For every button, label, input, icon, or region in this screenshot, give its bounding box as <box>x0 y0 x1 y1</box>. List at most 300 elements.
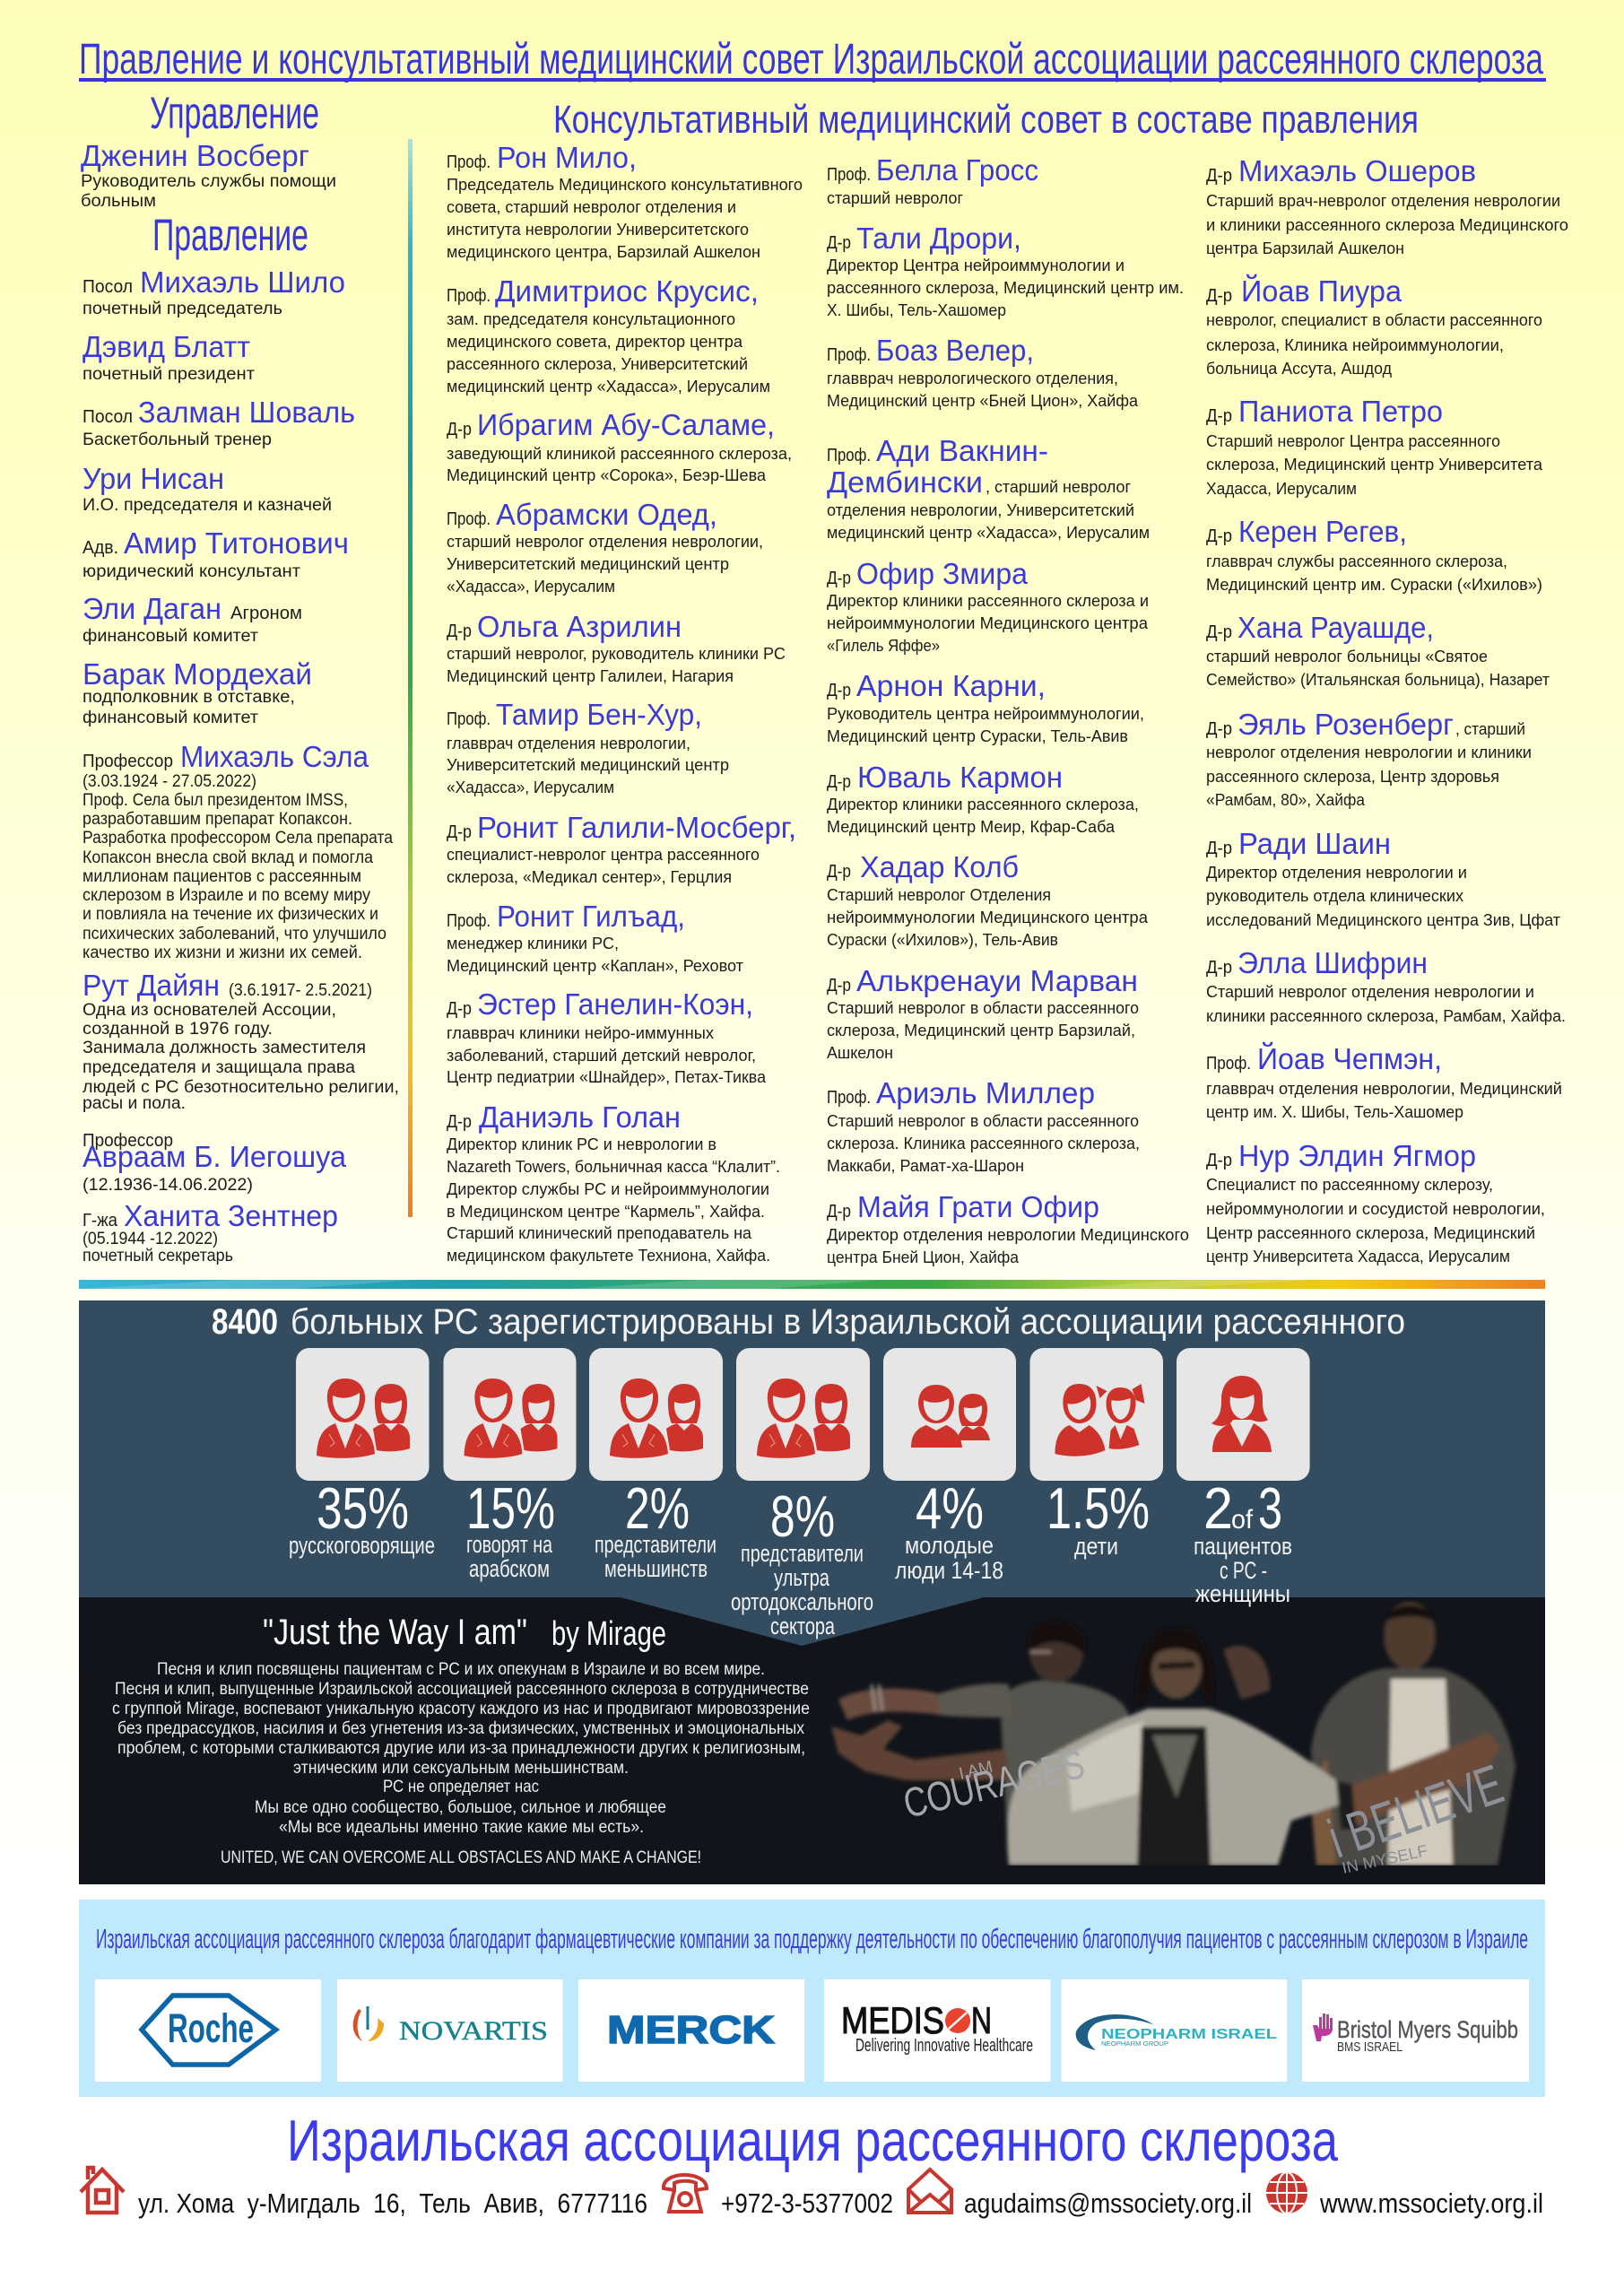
person: Ben-Hur <box>447 698 729 796</box>
text block: song description: Мы все одно сообщество, большое, сильное и любящее <box>255 1797 666 1817</box>
person: Piura: склероза, Клиника нейроиммунологии, <box>1206 335 1504 354</box>
person: Alkrenawi: Д-р <box>827 976 851 996</box>
person: Blatt: почетный президент <box>83 365 255 384</box>
person: Alkrenawi: Ашкелон <box>827 1043 893 1062</box>
logo: Neopharm Israel: NEOPHARM ISRAEL <box>1101 2027 1277 2042</box>
person: Dagan: Агроном <box>230 604 302 623</box>
person: Nisan: И.О. председателя и казначей <box>83 496 332 515</box>
person: Osherov: Михаэль Ошеров <box>1238 154 1476 187</box>
person: Rawashdeh <box>1206 611 1550 689</box>
logo: Bristol Myers Squibb: BMS ISRAEL <box>1337 2039 1403 2055</box>
person: Abramsky <box>447 498 763 596</box>
person: Karni: Руководитель центра нейроиммунологии, <box>827 704 1144 723</box>
logo: Bristol Myers Squibb <box>1302 1979 1529 2082</box>
person: Chapman: центр им. Х. Шибы, Тель-Хашомер <box>1206 1102 1463 1121</box>
person: Ben-Hur: «Хадасса», Иерусалим <box>447 778 614 796</box>
person: Gilad <box>447 900 744 975</box>
person: Grati Ofir: Директор отделения неврологии Медицинского <box>827 1225 1189 1244</box>
person: Zentner: Ханита Зентнер <box>124 1199 338 1232</box>
person: Regev: Керен Регев, <box>1238 515 1407 548</box>
person: Galili-Mosberg <box>447 811 796 886</box>
person: Dayan: председателя и защищала права <box>83 1058 355 1077</box>
person: Kolb: Сураски («Ихилов»), Тель-Авив <box>827 930 1058 949</box>
card: arabic speakers icon <box>443 1348 576 1481</box>
person: Abu-Salame: Д-р <box>447 420 472 439</box>
person: Rosenberg <box>1206 708 1532 809</box>
stat: 8% ultra-orthodox: сектора <box>770 1613 836 1639</box>
person: Dayan: (3.6.1917- 2.5.2021) <box>229 981 372 1000</box>
person: Dayan: расы и пола. <box>83 1094 186 1113</box>
person: Ganelin-Cohen: главврач клиники нейро-иммунных <box>447 1023 715 1042</box>
person: Gilad: Медицинский центр «Каплан», Реховот <box>447 956 744 975</box>
heading: advisory council: Консультативный медицинский совет в составе правления <box>553 98 1419 142</box>
person: Shoval <box>83 396 355 449</box>
person: Zentner: (05.1944 -12.2022) <box>83 1230 218 1248</box>
person: Titonovich <box>83 526 349 581</box>
person: Shaeen: руководитель отдела клинических <box>1206 886 1464 905</box>
person: Titonovich: юридический консультант <box>83 562 300 581</box>
stat: 35% russian speakers <box>289 1475 435 1559</box>
stat: 2% minorities: представители <box>595 1531 716 1558</box>
person: Titonovich: Амир Титонович <box>124 526 349 560</box>
rainbow band <box>79 1280 1545 1289</box>
logo: Neopharm Israel: NEOPHARM GROUP <box>1101 2041 1168 2048</box>
person: Shaeen <box>1206 827 1560 929</box>
person: Dayan: Рут Дайян <box>83 969 220 1002</box>
card: russian speakers icon <box>296 1348 429 1481</box>
person: Sela: миллионам пациентов с рассеянным <box>83 867 361 886</box>
email: agudaims@mssociety.org.il <box>964 2187 1252 2219</box>
overlay word: IN MYSELF: IN MYSELF <box>1341 1841 1429 1877</box>
person: Rawashdeh: старший невролог больницы «Святое <box>1206 647 1488 665</box>
person: Zmira: Офир Змира <box>856 557 1029 590</box>
stat: 4% young people: молодые <box>905 1532 994 1559</box>
person: Milo: Рон Мило, <box>497 141 637 174</box>
stat: 2 of 3 women: с РС - <box>1220 1557 1267 1584</box>
person: Golan: Д-р <box>447 1112 472 1132</box>
logo: Roche <box>95 1979 321 2082</box>
person: Alkrenawi: Алькренауи Марван <box>856 964 1138 997</box>
person: Chapman: Проф. <box>1206 1054 1251 1074</box>
person: Petrou: Паниота Петро <box>1238 395 1443 428</box>
person: Vosberg: больным <box>81 192 156 211</box>
person: Zentner <box>83 1199 338 1265</box>
text block: song description: проблем, с которыми сталкиваются другие или из-за принадлежности других к религиозным, <box>117 1738 805 1758</box>
person: Osherov: и клиники рассеянного склероза Медицинского <box>1206 215 1568 234</box>
decorative photo shapes <box>1311 1668 1515 1866</box>
person: Miller: склероза. Клиника рассеянного склероза, <box>827 1134 1140 1152</box>
person: Abu-Salame <box>447 408 792 484</box>
logo: Merck: MERCK <box>607 2008 775 2052</box>
stat: 2% minorities <box>595 1475 716 1582</box>
person: Shaeen: Д-р <box>1206 839 1232 858</box>
person: Rosenberg: невролог отделения неврологии и клиники <box>1206 743 1532 761</box>
person: Karni: Медицинский центр Сураски, Тель-Авив <box>827 726 1128 745</box>
person: Sela: психических заболеваний, что улучшило <box>83 925 386 944</box>
person: Sela: Копаксон внесла свой вклад и помогла <box>83 848 373 867</box>
person: Galili-Mosberg: специалист-невролог центра рассеянного <box>447 845 760 864</box>
person: Sela: и повлияла на течение их физических и <box>83 905 378 924</box>
person: Piura: больница Ассута, Ашдод <box>1206 359 1392 378</box>
stat: 2 of 3 women: женщины <box>1195 1580 1290 1607</box>
stat: 4% young people: 4% <box>916 1475 984 1541</box>
website: www.mssociety.org.il <box>1319 2187 1543 2219</box>
person: Yaghmour: Нур Элдин Ягмор <box>1238 1139 1476 1172</box>
overlay word: COURAGES: COURAGES <box>899 1740 1089 1827</box>
logo: Merck <box>578 1979 804 2082</box>
person: Krousis <box>447 274 770 396</box>
person: Abu-Salame: Ибрагим Абу-Саламе, <box>477 408 775 441</box>
person: Rosenberg: Д-р <box>1206 719 1232 739</box>
person: Zentner: почетный секретарь <box>83 1247 233 1265</box>
person: Gilad: Проф. <box>447 911 491 931</box>
person: Mordechai: подполковник в отставке, <box>83 688 295 707</box>
stat: 8% ultra-orthodox: 8% <box>770 1483 835 1549</box>
person: Alkrenawi: склероза, Медицинский центр Барзилай, <box>827 1021 1135 1039</box>
overlay word: BELIEVE: i BELIEVE <box>1321 1753 1511 1870</box>
panel: management column <box>81 88 399 1265</box>
heading: registered patients: больных РС зарегистрированы в Израильской ассоциации рассеянного <box>291 1302 1405 1342</box>
panel: statistics <box>79 1300 1545 1655</box>
person: Petrou: Хадасса, Иерусалим <box>1206 479 1357 498</box>
person: Gross <box>827 153 1038 207</box>
panel: sponsors <box>79 1900 1545 2097</box>
person: Krousis: Димитриос Крусис, <box>495 274 759 308</box>
person: Petrou <box>1206 395 1543 498</box>
person: Miller: Проф. <box>827 1088 871 1108</box>
person: Abramsky: Абрамски Одед, <box>496 498 717 531</box>
phone number: +972-3-5377002 <box>721 2187 893 2219</box>
person: Yehoshua: Профессор <box>83 1131 173 1151</box>
person: Rawashdeh: Хана Рауашде, <box>1238 611 1434 644</box>
person: Rawashdeh: Семейство» (Итальянская больница), Назарет <box>1206 670 1550 689</box>
person: Golan: Старший клинический преподаватель на <box>447 1223 752 1242</box>
person: Drori: Д-р <box>827 233 851 253</box>
person: Vaknin-Dembinsky: отделения неврологии, Университетский <box>827 500 1134 519</box>
person: Abramsky: Проф. <box>447 509 491 529</box>
person: Miller <box>827 1076 1140 1175</box>
person: Karni <box>827 669 1144 745</box>
person: Blatt: Дэвид Блатт <box>83 330 250 363</box>
stat: 8% ultra-orthodox <box>731 1483 873 1639</box>
person: Piura: невролог, специалист в области рассеянного <box>1206 310 1542 329</box>
stat: 35% russian speakers: 35% <box>317 1475 409 1541</box>
person: Sela: Михаэль Сэла <box>180 740 369 773</box>
person: Gilad: Ронит Гилъад, <box>497 900 685 933</box>
stat: 8% ultra-orthodox: представители <box>741 1540 864 1567</box>
person: Sela: Разработка профессором Села препарата <box>83 829 393 848</box>
person: Rosenberg: Эяль Розенберг <box>1238 708 1454 741</box>
stat: 2% minorities: 2% <box>625 1475 690 1541</box>
text block: song description: «Мы все идеальны именно такие какие мы есть». <box>279 1817 644 1837</box>
person: Chapman <box>1206 1042 1562 1121</box>
person: Yaghmour: Центр рассеянного склероза, Медицинский <box>1206 1223 1535 1242</box>
stat: 2 of 3 women: 2 <box>1203 1475 1233 1541</box>
person: Osherov: Старший врач-невролог отделения неврологии <box>1206 191 1560 210</box>
person: Azrilin: Медицинский центр Галилеи, Нагария <box>447 666 734 685</box>
person: Shoval: Залман Шоваль <box>138 396 355 429</box>
text block: song description: Песня и клип посвящены пациентам с РС и их опекунам в Израиле и во всем мире. <box>157 1659 765 1679</box>
person: Krousis: зам. председателя консультационного <box>447 309 735 328</box>
address: ул. Хома у-Мигдаль 16, Тель Авив, 6777116 <box>138 2187 647 2219</box>
stat: 4% young people <box>895 1475 1003 1584</box>
person: Vosberg: Руководитель службы помощи <box>81 172 336 191</box>
stat: 15% arabic: арабском <box>469 1555 550 1582</box>
person: Abramsky: старший невролог отделения неврологии, <box>447 532 763 551</box>
person: Karmon: Юваль Кармон <box>857 761 1063 794</box>
icon: globe <box>1266 2172 1307 2213</box>
person: Dagan: финансовый комитет <box>83 627 258 646</box>
person: Rawashdeh: Д-р <box>1206 622 1232 642</box>
person: Shaeen: Директор отделения неврологии и <box>1206 863 1467 882</box>
person: Vaknin-Dembinsky: Ади Вакнин- <box>876 434 1048 467</box>
person: Ben-Hur: Университетский медицинский центр <box>447 755 729 774</box>
person: Alkrenawi: Старший невролог в области рассеянного <box>827 998 1139 1017</box>
footer heading: Израильская ассоциация рассеянного склероза <box>287 2108 1339 2173</box>
person: Rosenberg: «Рамбам, 80», Хайфа <box>1206 790 1366 809</box>
person: Nisan <box>83 462 332 515</box>
heading: management: Управление <box>150 88 319 138</box>
gradient divider <box>408 139 413 1217</box>
person: Shilo: Михаэль Шило <box>140 265 345 299</box>
logo: Medison: N <box>971 1999 992 2041</box>
heading: song title: "Just the Way I am" <box>263 1613 527 1652</box>
person: Sela: качество их жизни и жизни их семей. <box>83 944 362 962</box>
person: Mordechai <box>83 657 312 727</box>
card: ultra-orthodox icon <box>736 1348 870 1481</box>
person: Zmira: Директор клиники рассеянного склероза и <box>827 591 1149 610</box>
person: Dagan <box>83 592 302 646</box>
logo: Medison: Delivering Innovative Healthcare <box>855 2036 1033 2056</box>
person: Golan: Директор службы РС и нейроиммунологии <box>447 1179 769 1198</box>
stat: 1.5% children: дети <box>1074 1533 1118 1560</box>
person: Zmira <box>827 557 1149 655</box>
person: Piura: Д-р <box>1206 286 1232 306</box>
person: Petrou: Д-р <box>1206 406 1232 426</box>
person: Miller: Старший невролог в области рассеянного <box>827 1111 1139 1130</box>
person: Abramsky: Университетский медицинский центр <box>447 554 729 573</box>
person: Zentner: Г-жа <box>83 1211 118 1231</box>
person: Karmon: Медицинский центр Меир, Кфар-Саба <box>827 817 1116 836</box>
person: Sela: разработавшим препарат Копаксон. <box>83 810 352 829</box>
text block: song description: этническим или сексуальным меньшинствам. <box>293 1758 629 1778</box>
card: children icon <box>1029 1348 1163 1481</box>
person: Galili-Mosberg: Ронит Галили-Мосберг, <box>477 811 796 844</box>
person: Golan: медицинском факультете Техниона, Хайфа. <box>447 1246 770 1265</box>
stat: 2 of 3 women: 3 <box>1258 1475 1282 1541</box>
person: Regev: главврач службы рассеянного склероза, <box>1206 552 1507 570</box>
person: Milo <box>447 141 803 261</box>
person: Shifrin: Старший невролог отделения неврологии и <box>1206 982 1534 1001</box>
person: Drori: Х. Шибы, Тель-Хашомер <box>827 300 1006 319</box>
person: Krousis: медицинского совета, директор центра <box>447 332 743 351</box>
person: Miller: Маккаби, Рамат-ха-Шарон <box>827 1156 1024 1175</box>
person: Osherov <box>1206 154 1568 257</box>
stat: 8% ultra-orthodox: ортодоксального <box>731 1588 873 1615</box>
person: Dayan: созданной в 1976 году. <box>83 1020 273 1039</box>
person: Yaghmour: Специалист по рассеянному склерозу, <box>1206 1175 1493 1194</box>
person: Vaknin-Dembinsky <box>827 434 1150 542</box>
person: Mordechai: финансовый комитет <box>83 709 258 727</box>
person: Weller: Боаз Велер, <box>876 334 1034 367</box>
person: Zmira: Д-р <box>827 569 851 588</box>
person: Alkrenawi <box>827 964 1139 1062</box>
overlay word: I AM: I AM <box>957 1758 994 1784</box>
person: Gross: Проф. <box>827 165 871 185</box>
stat: 15% arabic: 15% <box>466 1475 555 1541</box>
stat: 1.5% children <box>1046 1475 1150 1560</box>
person: Milo: совета, старший невролог отделения и <box>447 197 736 216</box>
person: Yaghmour: Д-р <box>1206 1151 1232 1170</box>
person: Milo: медицинского центра, Барзилай Ашкелон <box>447 242 760 261</box>
person: Vaknin-Dembinsky: , старший невролог <box>986 477 1131 496</box>
person: Golan: в Медицинском центре “Кармель”, Хайфа. <box>447 1202 765 1221</box>
icon: telephone <box>664 2175 707 2212</box>
person: Krousis: рассеянного склероза, Университетский <box>447 354 748 373</box>
person: Kolb: нейроиммунологии Медицинского центра <box>827 908 1149 926</box>
person: Chapman: главврач отделения неврологии, Медицинский <box>1206 1079 1562 1098</box>
heading: board: Правление <box>152 210 308 260</box>
text block: song description: UNITED, WE CAN OVERCOME ALL OBSTACLES AND MAKE A CHANGE! <box>221 1848 701 1867</box>
person: Miller: Ариэль Миллер <box>876 1076 1095 1109</box>
person: Grati Ofir: Майя Грати Офир <box>857 1190 1099 1223</box>
icon: house <box>81 2168 124 2213</box>
person: Grati Ofir: центра Бней Цион, Хайфа <box>827 1248 1020 1266</box>
person: Kolb <box>827 850 1149 949</box>
person: Petrou: склероза, Медицинский центр Университета <box>1206 455 1543 474</box>
person: Dayan: Занимала должность заместителя <box>83 1039 366 1057</box>
person: Karni: Д-р <box>827 681 851 700</box>
person: Shilo: почетный председатель <box>83 300 282 318</box>
person: Ben-Hur: Тамир Бен-Хур, <box>496 698 702 731</box>
heading: song title: by Mirage <box>551 1615 666 1653</box>
person: Ben-Hur: главврач отделения неврологии, <box>447 734 690 752</box>
person: Drori: рассеянного склероза, Медицинский центр им. <box>827 278 1184 297</box>
person: Osherov: Д-р <box>1206 166 1232 186</box>
person: Vaknin-Dembinsky: медицинский центр «Хадасса», Иерусалим <box>827 523 1150 542</box>
person: Shaeen: Ради Шаин <box>1238 827 1391 860</box>
person: Azrilin <box>447 610 786 685</box>
person: Milo: института неврологии Университетского <box>447 220 749 239</box>
person: Ganelin-Cohen: Центр педиатрии «Шнайдер», Петах-Тиква <box>447 1067 767 1086</box>
stat: 35% russian speakers: русскоговорящие <box>289 1532 435 1559</box>
stat: 2 of 3 women: пациентов <box>1194 1533 1292 1560</box>
person: Golan <box>447 1100 780 1265</box>
person: Sela: склерозом в Израиле и по всему миру <box>83 886 370 905</box>
person: Galili-Mosberg: Д-р <box>447 822 472 842</box>
person: Vosberg <box>81 139 336 211</box>
person: Regev: Медицинский центр им. Сураски («Ихилов») <box>1206 575 1542 594</box>
person: Shilo <box>83 265 345 318</box>
person: Kolb: Хадар Колб <box>860 850 1019 883</box>
person: Yaghmour: центр Университета Хадасса, Иерусалим <box>1206 1247 1510 1265</box>
person: Azrilin: Ольга Азрилин <box>477 610 682 643</box>
person: Shifrin <box>1206 946 1566 1025</box>
text block: song description: без предрассудков, насилия и без угнетения из-за физических, умственных и эмоциональных <box>117 1718 804 1738</box>
person: Grati Ofir: Д-р <box>827 1202 851 1222</box>
person: Chapman: Йоав Чепмэн, <box>1257 1042 1442 1075</box>
person: Weller <box>827 334 1139 410</box>
person: Dayan: Одна из основателей Ассоции, <box>83 1001 336 1020</box>
person: Shifrin: клиники рассеянного склероза, Рамбам, Хайфа. <box>1206 1006 1566 1025</box>
person: Gilad: менеджер клиники РС, <box>447 934 619 952</box>
person: Shaeen: исследований Медицинского центра Зив, Цфат <box>1206 910 1560 929</box>
person: Blatt <box>83 330 255 384</box>
stat: 2% minorities: меньшинств <box>604 1555 708 1582</box>
person: Shoval: Посол <box>83 407 133 427</box>
person: Regev: Д-р <box>1206 526 1232 546</box>
icon: envelope <box>908 2170 951 2213</box>
logo: Medison <box>824 1979 1051 2082</box>
person: Mordechai: Барак Мордехай <box>83 657 312 691</box>
person: Ben-Hur: Проф. <box>447 709 491 729</box>
panel: song and video <box>79 1597 1545 1884</box>
person: Shifrin: Элла Шифрин <box>1238 946 1428 979</box>
person: Zmira: нейроиммунологии Медицинского центра <box>827 613 1149 632</box>
person: Sela: Проф. Села был президентом IMSS, <box>83 791 348 810</box>
person: Abramsky: «Хадасса», Иерусалим <box>447 577 615 596</box>
stat: 4% young people: люди 14-18 <box>895 1557 1003 1584</box>
person: Yehoshua <box>83 1131 347 1195</box>
person: Karmon: Д-р <box>827 772 851 792</box>
person: Krousis: медицинский центр «Хадасса», Иерусалим <box>447 377 770 396</box>
person: Sela: (3.03.1924 - 27.05.2022) <box>83 772 256 791</box>
person: Azrilin: Д-р <box>447 622 472 641</box>
person: Piura: Йоав Пиура <box>1241 274 1403 308</box>
person: Weller: Проф. <box>827 345 871 365</box>
person: Ganelin-Cohen: Эстер Ганелин-Коэн, <box>477 987 753 1021</box>
person: Drori: Директор Центра нейроиммунологии и <box>827 256 1125 274</box>
person: Grati Ofir <box>827 1190 1189 1266</box>
person: Zmira: «Гилель Яффе» <box>827 636 940 655</box>
person: Shifrin: Д-р <box>1206 958 1232 978</box>
person: Yehoshua: (12.1936-14.06.2022) <box>83 1176 253 1195</box>
person: Drori: Тали Дрори, <box>856 222 1021 255</box>
stat: 1.5% children: 1.5% <box>1046 1475 1150 1541</box>
person: Piura <box>1206 274 1542 378</box>
person: Milo: Председатель Медицинского консультативного <box>447 175 803 194</box>
heading: registered patients: 8400 <box>212 1302 278 1342</box>
person: Vaknin-Dembinsky: Проф. <box>827 446 871 465</box>
card: women icon <box>1177 1348 1310 1481</box>
logo: Novartis: NOVARTIS <box>399 2016 548 2046</box>
person: Abu-Salame: Медицинский центр «Сорока», Беэр-Шева <box>447 465 767 484</box>
panel: medical advisory council <box>447 98 1568 1266</box>
person: Ganelin-Cohen <box>447 987 767 1086</box>
person: Golan: Nazareth Towers, больничная касса “Клалит”. <box>447 1157 780 1176</box>
logo: Novartis <box>337 1979 563 2082</box>
person: Nisan: Ури Нисан <box>83 462 224 495</box>
person: Dayan: людей с РС безотносительно религии, <box>83 1078 399 1097</box>
person: Azrilin: старший невролог, руководитель клиники РС <box>447 644 786 663</box>
person: Golan: Даниэль Голан <box>479 1100 681 1134</box>
person: Karni: Арнон Карни, <box>856 669 1046 702</box>
person: Galili-Mosberg: склероза, «Медикал сентер», Герцлия <box>447 867 732 886</box>
person: Rosenberg: , старший <box>1455 719 1525 738</box>
person: Karmon <box>827 761 1139 836</box>
person: Gross: старший невролог <box>827 188 963 207</box>
person: Osherov: центра Барзилай Ашкелон <box>1206 239 1404 257</box>
person: Dayan <box>83 969 399 1113</box>
stat: 8% ultra-orthodox: ультра <box>774 1564 830 1591</box>
person: Ganelin-Cohen: заболеваний, старший детский невролог, <box>447 1046 756 1065</box>
stat: 15% arabic: говорят на <box>466 1531 553 1558</box>
person: Titonovich: Адв. <box>83 538 118 558</box>
person: Gross: Белла Гросс <box>876 153 1038 187</box>
person: Milo: Проф. <box>447 152 491 172</box>
text block: song description: с группой Mirage, воспевают уникальную красоту каждого из нас и продвигают мировоззрение <box>112 1699 810 1718</box>
person: Drori <box>827 222 1184 319</box>
